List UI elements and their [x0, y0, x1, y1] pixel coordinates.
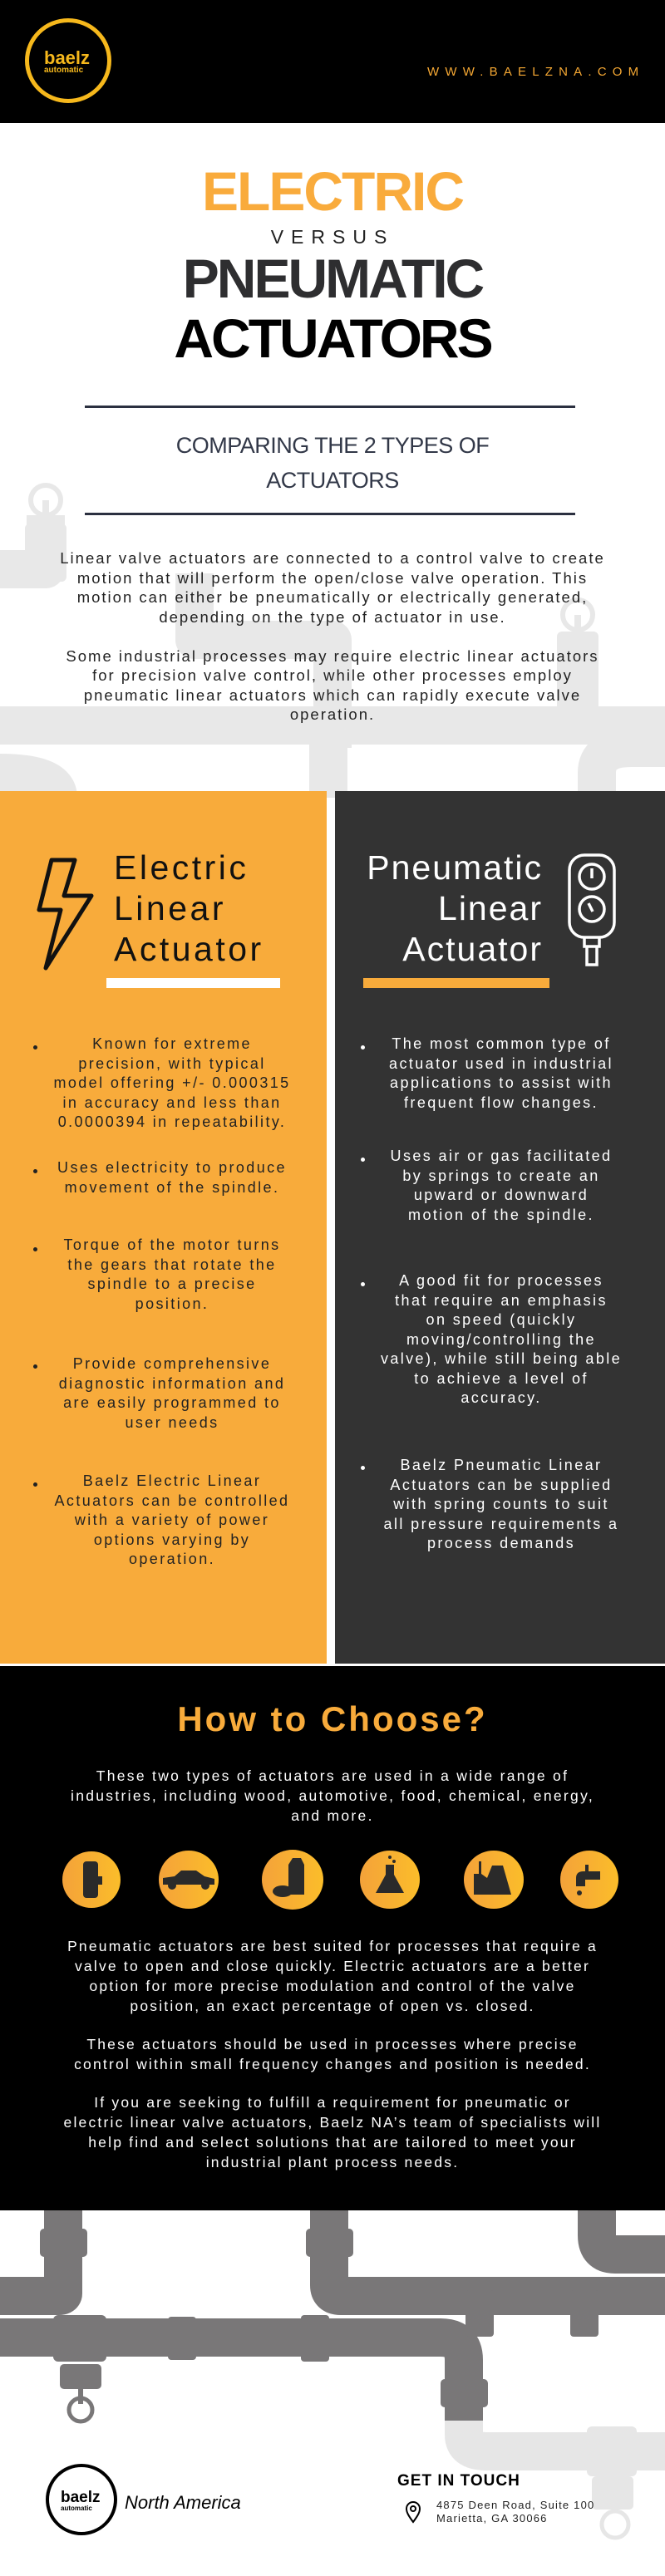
panel: electric: are easily programmed to	[63, 1394, 281, 1411]
panel: electric: Uses electricity to produce	[57, 1159, 287, 1176]
panel: pneumatic: with spring counts to suit	[393, 1496, 609, 1512]
footer logo: baelz north america: North America	[125, 2492, 241, 2513]
panel: electric: Provide comprehensive	[73, 1355, 271, 1372]
bottom pipes	[0, 2210, 665, 2539]
paragraph text: electric linear valve actuators, Baelz NA’s team of specialists will	[64, 2114, 601, 2131]
intro text: pneumatic linear actuators which can rapidly execute valve	[84, 686, 581, 703]
heading: Linear	[114, 889, 226, 927]
website url: WWW.BAELZNA.COM	[427, 65, 644, 79]
panel: pneumatic: motion of the spindle.	[408, 1207, 594, 1223]
icon: food	[262, 1850, 323, 1910]
panel: pneumatic: Uses air or gas facilitated	[391, 1148, 612, 1164]
intro text: motion can either be pneumatically or electrically generated,	[77, 588, 588, 606]
icon: car	[159, 1851, 219, 1909]
heading	[114, 848, 264, 968]
subtitle: ACTUATORS	[266, 468, 399, 493]
intro text: and more.	[291, 1807, 374, 1824]
paragraph text: These actuators should be used in processes where precise	[86, 2036, 579, 2052]
panel: pneumatic: all pressure requirements a	[384, 1516, 618, 1532]
icon: wood	[62, 1851, 121, 1908]
title: ELECTRIC	[202, 160, 463, 222]
panel: pneumatic: valve), while still being able	[381, 1350, 622, 1367]
section: how to choose	[0, 1666, 665, 2210]
bullets	[33, 1045, 37, 1050]
intro text: Linear valve actuators are connected to a control valve to create	[60, 549, 605, 567]
intro text: operation.	[290, 705, 375, 723]
paragraph text	[64, 1938, 601, 2170]
panel: pneumatic: process demands	[427, 1535, 575, 1551]
subtitle: COMPARING THE 2 TYPES OF	[176, 433, 489, 458]
intro text: industries, including wood, automotive, food, chemical, energy,	[71, 1787, 594, 1804]
industry icons	[62, 1850, 618, 1910]
heading: Actuator	[402, 930, 543, 968]
panel: pneumatic: A good fit for processes	[399, 1272, 603, 1289]
panel: pneumatic: moving/controlling the	[406, 1331, 596, 1348]
panel: pneumatic: The most common type of	[392, 1035, 611, 1052]
panel: pneumatic: by springs to create an	[402, 1167, 600, 1183]
panel: electric: Baelz Electric Linear	[83, 1472, 261, 1489]
panel: electric: movement of the spindle.	[65, 1178, 279, 1195]
paragraph text: control within small frequency changes and position is needed.	[74, 2056, 591, 2072]
footer logo: baelz north america: baelz	[61, 2489, 101, 2506]
panel: electric: options varying by	[94, 1531, 250, 1547]
title: VERSUS	[271, 226, 394, 248]
panel: pneumatic	[335, 791, 665, 1664]
panel: pneumatic: Actuators can be supplied	[390, 1476, 613, 1492]
intro text	[71, 1767, 594, 1824]
bullets	[361, 1045, 365, 1050]
panel: pneumatic: applications to assist with	[390, 1074, 613, 1091]
panel: electric: with a variety of power	[75, 1512, 269, 1528]
panel: pneumatic: on speed (quickly	[426, 1311, 576, 1328]
heading: Pneumatic	[367, 848, 543, 887]
paragraph text: Pneumatic actuators are best suited for processes that require a	[67, 1938, 598, 1954]
heading: How to Choose?	[177, 1699, 488, 1738]
panel: electric: in accuracy and less than	[62, 1094, 282, 1110]
panel: electric: precision, with typical	[78, 1055, 266, 1072]
intro text: These two types of actuators are used in a wide range of	[96, 1767, 569, 1784]
contact block: GET IN TOUCH	[397, 2472, 520, 2490]
footer logo: baelz north america	[46, 2464, 241, 2535]
contact block: Marietta, GA 30066	[436, 2512, 548, 2524]
header bar	[0, 0, 665, 123]
paragraph text: If you are seeking to fulfill a requirement for pneumatic or	[94, 2094, 571, 2111]
panel: pneumatic: frequent flow changes.	[404, 1094, 598, 1110]
paragraph text: position, an exact percentage of open vs. closed.	[130, 1998, 535, 2014]
paragraph text: help find and select solutions that are tailored to meet your	[88, 2134, 577, 2151]
subtitle	[176, 433, 489, 493]
icon: chemical	[360, 1851, 420, 1909]
title: ACTUATORS	[174, 307, 491, 369]
panel: electric	[0, 791, 327, 1664]
panel: electric: spindle to a precise	[87, 1276, 257, 1292]
intro text: Some industrial processes may require electric linear actuators	[66, 646, 599, 665]
panel: electric: Known for extreme	[92, 1035, 252, 1052]
paragraph text: option for more precise modulation and control of the valve	[89, 1978, 576, 1994]
panel: pneumatic: accuracy.	[461, 1389, 542, 1406]
panel: pneumatic: to achieve a level of	[414, 1369, 589, 1386]
panel: pneumatic: actuator used in industrial	[389, 1055, 613, 1072]
heading: Actuator	[114, 930, 264, 968]
heading: Electric	[114, 848, 249, 887]
panel: electric: operation.	[129, 1551, 215, 1567]
paragraph text: valve to open and close quickly. Electric actuators are a better	[75, 1958, 590, 1974]
panel: electric: model offering +/- 0.000315	[53, 1074, 291, 1091]
footer logo: baelz north america: automatic	[61, 2505, 92, 2512]
title: PNEUMATIC	[183, 248, 482, 309]
icon: water tap	[560, 1851, 618, 1909]
icon: location pin	[406, 2501, 421, 2523]
logo: baelz automatic: baelz	[44, 47, 90, 68]
panel: electric: Actuators can be controlled	[55, 1492, 289, 1509]
logo: baelz automatic	[25, 18, 111, 103]
icon: pressure gauge	[568, 853, 616, 966]
intro text: for precision valve control, while other processes employ	[92, 666, 573, 684]
panel: electric: the gears that rotate the	[67, 1256, 277, 1273]
panel: pneumatic: upward or downward	[414, 1187, 589, 1203]
panel: pneumatic: that require an emphasis	[395, 1291, 608, 1308]
panel: electric: 0.0000394 in repeatability.	[58, 1113, 286, 1130]
intro text: depending on the type of actuator in use.	[159, 608, 506, 625]
panel: electric: diagnostic information and	[59, 1374, 285, 1391]
heading	[367, 848, 543, 968]
background pipes: intro	[0, 483, 665, 798]
intro text	[60, 549, 605, 723]
panel: electric: position.	[135, 1295, 209, 1311]
panel: electric: user needs	[125, 1414, 219, 1431]
contact block: 4875 Deen Road, Suite 100	[436, 2499, 594, 2511]
icon: lightning	[37, 858, 93, 971]
icon: energy	[464, 1851, 524, 1909]
heading: Linear	[438, 889, 543, 927]
panel: electric: Torque of the motor turns	[63, 1236, 281, 1253]
title	[174, 160, 492, 369]
contact block	[397, 2472, 594, 2524]
intro text: motion that will perform the open/close valve operation. This	[77, 568, 588, 587]
paragraph text: industrial plant process needs.	[206, 2154, 459, 2170]
panel: pneumatic: Baelz Pneumatic Linear	[401, 1457, 602, 1473]
logo: baelz automatic: automatic	[44, 66, 83, 75]
